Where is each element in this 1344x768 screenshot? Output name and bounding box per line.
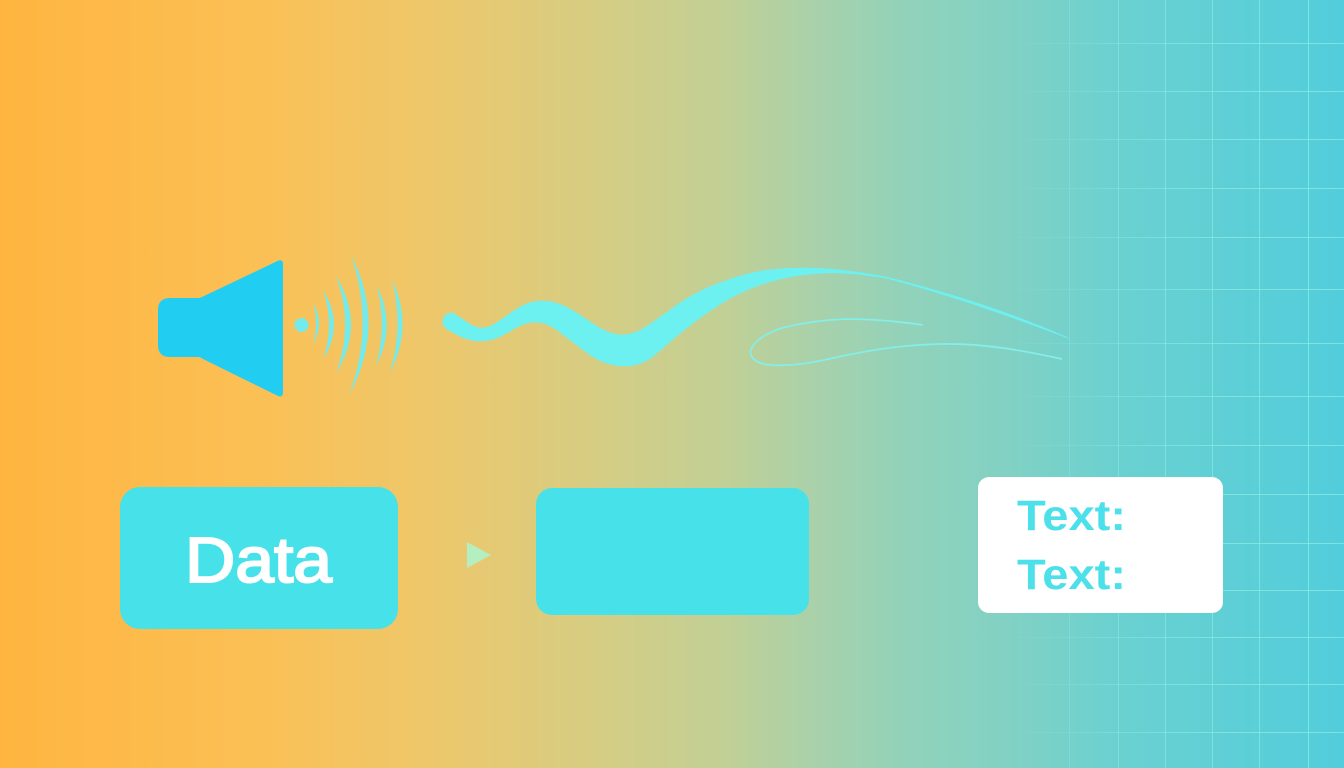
empty process box bbox=[536, 488, 809, 615]
icon: sound waves bbox=[294, 255, 403, 395]
data label: Data bbox=[185, 524, 332, 596]
wave arc 6 bbox=[390, 280, 403, 372]
icon: speaker bbox=[158, 260, 283, 396]
wavy sound ribbon bbox=[443, 268, 1068, 366]
wave arc 4 bbox=[349, 255, 369, 395]
sound source dot bbox=[294, 318, 308, 332]
text line 1: Text: bbox=[1017, 492, 1126, 540]
wave arc 2 bbox=[323, 290, 334, 359]
thin looping line bbox=[751, 319, 1062, 365]
wave arc 5 bbox=[376, 286, 387, 366]
wave arc 1 bbox=[313, 303, 319, 344]
wave arc 3 bbox=[336, 276, 351, 373]
output text card bbox=[978, 477, 1223, 613]
background grid bbox=[1000, 0, 1344, 768]
text line 2: Text: bbox=[1017, 551, 1126, 599]
arrow bbox=[467, 542, 491, 568]
data box bbox=[120, 487, 398, 629]
